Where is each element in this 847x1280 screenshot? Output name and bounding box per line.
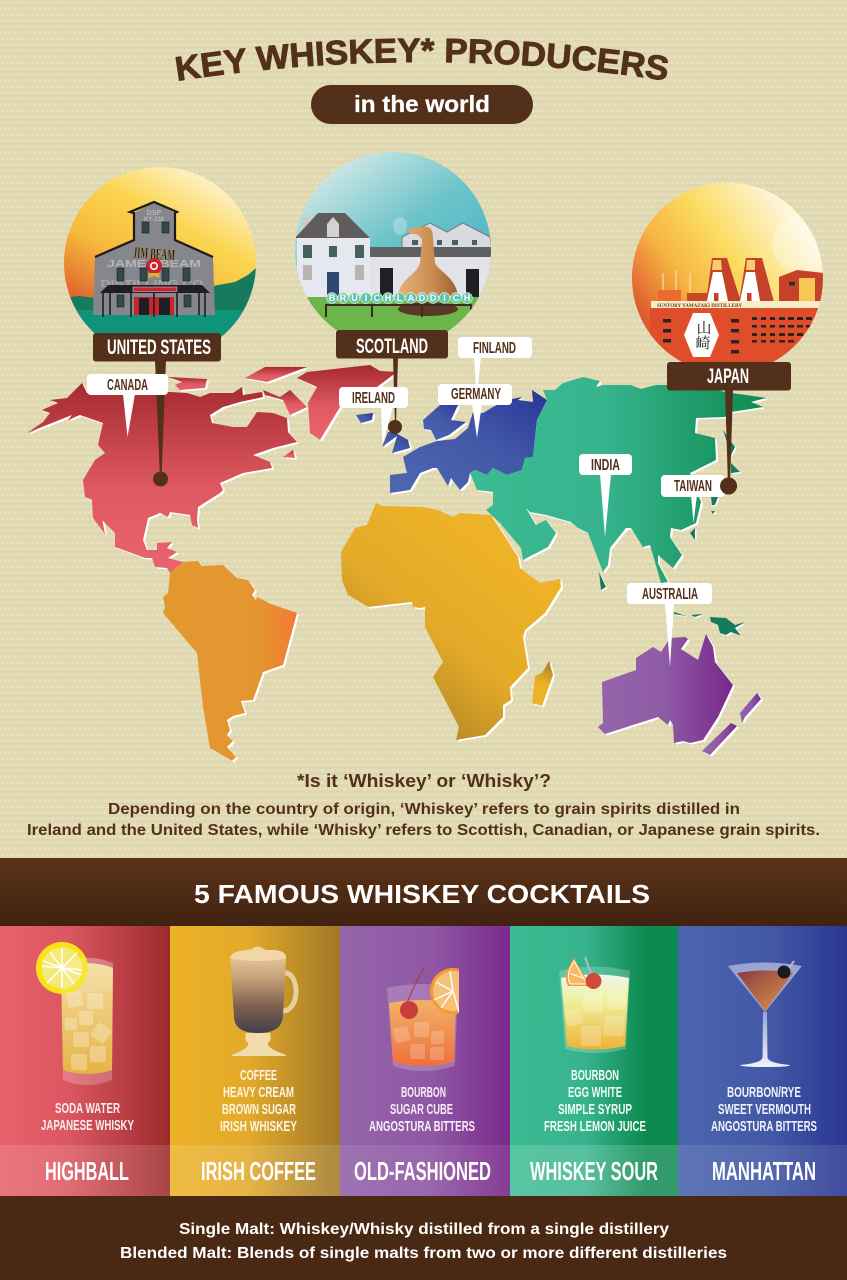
building: DISTILLING CO <box>100 279 204 290</box>
building: JAMES BEAM <box>107 259 201 270</box>
pin: scotland <box>336 330 448 434</box>
pin: united states: UNITED STATES <box>107 336 211 359</box>
note on spelling: Ireland and the United States, while ‘Whisky’ refers to Scottish, Canadian, or Japanese grain spirits. <box>27 822 820 839</box>
footer definitions: Single Malt: Whiskey/Whisky distilled from a single distillery <box>179 1221 669 1238</box>
sign: I <box>365 293 367 303</box>
sign: B <box>329 293 336 303</box>
sign: C <box>374 293 381 303</box>
panel: whiskey sour: FRESH LEMON JUICE <box>544 1118 646 1135</box>
name band <box>651 301 820 308</box>
logo hexagon <box>684 313 719 357</box>
note on spelling: *Is it ‘Whiskey’ or ‘Whisky’? <box>297 771 551 791</box>
note on spelling: Depending on the country of origin, ‘Whiskey’ refers to grain spirits distilled in <box>108 801 740 818</box>
sign: C <box>453 293 460 303</box>
sign: H <box>464 293 470 303</box>
sign: U <box>351 293 358 303</box>
panel: irish coffee: COFFEE <box>240 1067 277 1084</box>
continent: europe <box>356 390 549 495</box>
panel: highball: HIGHBALL <box>45 1156 129 1186</box>
scene: jim beam distillery <box>64 167 256 337</box>
sign: H <box>385 293 391 303</box>
panel: old-fashioned: ANGOSTURA BITTERS <box>369 1118 475 1135</box>
label: india <box>579 454 632 537</box>
panel: whiskey sour <box>510 926 678 1196</box>
logo hexagon: 崎 <box>695 332 711 353</box>
label: taiwan <box>661 475 725 523</box>
building: DSP <box>147 210 162 217</box>
sun glow <box>772 217 822 272</box>
panel: irish coffee: HEAVY CREAM <box>223 1084 294 1101</box>
sign: R <box>340 293 347 303</box>
sign: L <box>397 293 403 303</box>
distant pillars <box>662 270 691 293</box>
continent: south america <box>163 561 299 763</box>
icon: manhattan glass <box>728 961 802 1067</box>
panel: old-fashioned: OLD-FASHIONED <box>354 1156 491 1186</box>
warehouse <box>779 270 824 302</box>
label: finland <box>458 337 532 385</box>
label: germany: GERMANY <box>451 386 501 403</box>
world map <box>27 365 768 763</box>
footer definitions: Blended Malt: Blends of single malts from two or more different distilleries <box>120 1245 727 1262</box>
continent: australia <box>598 634 763 757</box>
icon: whiskey sour glass <box>559 957 630 1053</box>
panel: manhattan <box>678 926 847 1196</box>
footer definitions <box>0 1196 847 1280</box>
continent: north america <box>27 365 399 575</box>
panel: irish coffee: IRISH COFFEE <box>201 1156 316 1186</box>
pin: scotland: SCOTLAND <box>356 335 428 358</box>
white house <box>295 213 370 298</box>
steam <box>393 217 407 235</box>
panel: old-fashioned: BOURBON <box>401 1084 446 1101</box>
icon: highball glass <box>36 942 113 1085</box>
panel: whiskey sour: WHISKEY SOUR <box>530 1156 658 1186</box>
red building <box>650 308 818 362</box>
building <box>93 202 215 317</box>
panel: irish coffee: IRISH WHISKEY <box>220 1118 297 1135</box>
panel: whiskey sour: EGG WHITE <box>568 1084 622 1101</box>
label: canada: CANADA <box>107 377 148 394</box>
island: madagascar <box>532 661 555 708</box>
panel: old-fashioned <box>340 926 510 1196</box>
label: australia: AUSTRALIA <box>642 586 698 603</box>
islands: east asia and oceania <box>599 430 746 637</box>
fence <box>326 305 471 317</box>
copper pot still <box>398 227 458 296</box>
panel: irish coffee: BROWN SUGAR <box>222 1101 296 1118</box>
subtitle pill: in the world <box>354 91 490 117</box>
pin: japan: JAPAN <box>707 365 749 388</box>
building: KY-230 <box>144 217 165 223</box>
sign <box>327 293 472 303</box>
scene: yamazaki distillery <box>632 182 828 374</box>
windows <box>663 317 812 354</box>
sign: A <box>408 293 415 303</box>
grass <box>307 297 479 332</box>
panel: manhattan: BOURBON/RYE <box>727 1084 801 1101</box>
sign: I <box>443 293 446 303</box>
label: finland: FINLAND <box>473 340 516 357</box>
panel: highball: SODA WATER <box>55 1100 120 1117</box>
sign: D <box>419 293 426 303</box>
japan pin dot above taiwan label <box>720 478 737 494</box>
panel: irish coffee <box>170 926 340 1196</box>
pin: japan <box>667 362 791 494</box>
name band: SUNTORY YAMAZAKI DISTILLERY <box>657 303 742 309</box>
panel: whiskey sour: BOURBON <box>571 1067 619 1084</box>
continent: asia <box>470 377 768 585</box>
icon: irish coffee mug <box>230 947 296 1056</box>
ground <box>76 310 244 337</box>
panel: old-fashioned: SUGAR CUBE <box>390 1101 453 1118</box>
panel: highball: JAPANESE WHISKY <box>41 1117 134 1134</box>
panel: whiskey sour: SIMPLE SYRUP <box>558 1101 632 1118</box>
kiln roofs <box>706 258 774 302</box>
label: india: INDIA <box>591 457 620 474</box>
note on spelling <box>27 771 820 839</box>
logo hexagon: 山 <box>696 317 712 338</box>
icon: old-fashioned glass <box>387 968 459 1071</box>
cocktails header band: 5 FAMOUS WHISKEY COCKTAILS <box>194 881 650 909</box>
sign: D <box>430 293 437 303</box>
textured background <box>0 0 847 860</box>
label: germany <box>438 384 512 438</box>
label: taiwan: TAIWAN <box>674 478 712 495</box>
subtitle pill <box>311 85 533 124</box>
label: ireland: IRELAND <box>352 390 395 407</box>
back warehouse <box>402 223 492 250</box>
panel: highball <box>0 926 170 1196</box>
building: JIM BEAM <box>132 245 176 264</box>
tree line <box>64 268 256 325</box>
scene: bruichladdich distillery <box>295 152 492 350</box>
label: ireland <box>339 387 408 445</box>
continent: africa <box>341 503 563 742</box>
brown mound <box>398 302 458 316</box>
label: canada <box>87 374 168 437</box>
label: australia <box>627 583 712 667</box>
title: KEY WHISKEY* PRODUCERS <box>176 38 668 81</box>
cocktails header band <box>0 858 847 927</box>
pin: united states <box>93 333 221 486</box>
